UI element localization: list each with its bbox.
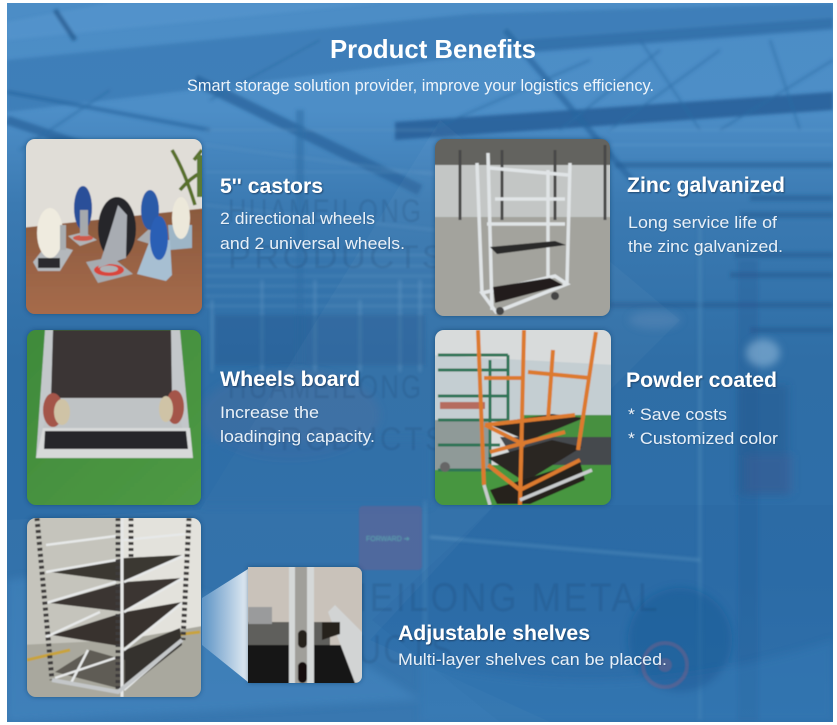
watermark text: PRODUCTS	[228, 239, 448, 275]
photo: wheels board	[20, 325, 210, 510]
fine greenhouse lattice	[205, 130, 435, 306]
photo: shelf detail zoom	[245, 565, 364, 685]
text block: powder coated	[626, 368, 778, 448]
watermark text: HUAMEILONG METAL	[228, 193, 528, 229]
text block: powder coated: * Customized color	[628, 429, 778, 448]
text block: castors: 2 directional wheels	[220, 209, 375, 228]
text block: adjustable shelves: Adjustable shelves	[398, 621, 590, 645]
watermark text	[228, 193, 660, 672]
text block: castors	[220, 174, 405, 253]
photo: powder coated trolley	[430, 325, 616, 510]
text block: zinc galvanized: the zinc galvanized.	[628, 237, 783, 256]
text block: zinc galvanized: Long service life of	[628, 213, 777, 232]
text block: castors: 5'' castors	[220, 174, 323, 198]
background diagonal light shape	[7, 120, 680, 722]
photo: zinc galvanized trolley	[430, 133, 616, 323]
background: faint red wheel	[643, 643, 687, 687]
text block: powder coated: Powder coated	[626, 368, 777, 392]
watermark text: HUAMEILONG METAL	[255, 576, 660, 620]
text block: wheels board: Increase the	[220, 403, 319, 422]
zoom wedge	[202, 569, 248, 682]
text block: adjustable shelves	[398, 621, 667, 669]
background: faint red forward box	[359, 506, 422, 570]
text block: powder coated: * Save costs	[628, 405, 727, 424]
title: Product Benefits	[330, 34, 536, 64]
text block: wheels board: loadinging capacity.	[220, 427, 375, 446]
text block: wheels board	[220, 367, 375, 446]
text block: zinc galvanized: Zinc galvanized	[627, 173, 785, 197]
text block: zinc galvanized	[627, 173, 785, 256]
watermark text: PRODUCTS	[255, 628, 455, 672]
text block: adjustable shelves: Multi-layer shelves can be placed.	[398, 650, 667, 669]
text block: castors: and 2 universal wheels.	[220, 234, 405, 253]
watermark text: PRODUCTS	[258, 421, 448, 457]
photo: adjustable shelves trolley	[20, 512, 208, 702]
watermark text: HUAMEILONG METAL	[228, 369, 528, 405]
subtitle: Smart storage solution provider, improve your logistics efficiency.	[187, 76, 654, 95]
photo: castors	[20, 133, 208, 320]
background: faint red forward box: FORWARD ➔	[366, 536, 410, 543]
text block: wheels board: Wheels board	[220, 367, 360, 391]
